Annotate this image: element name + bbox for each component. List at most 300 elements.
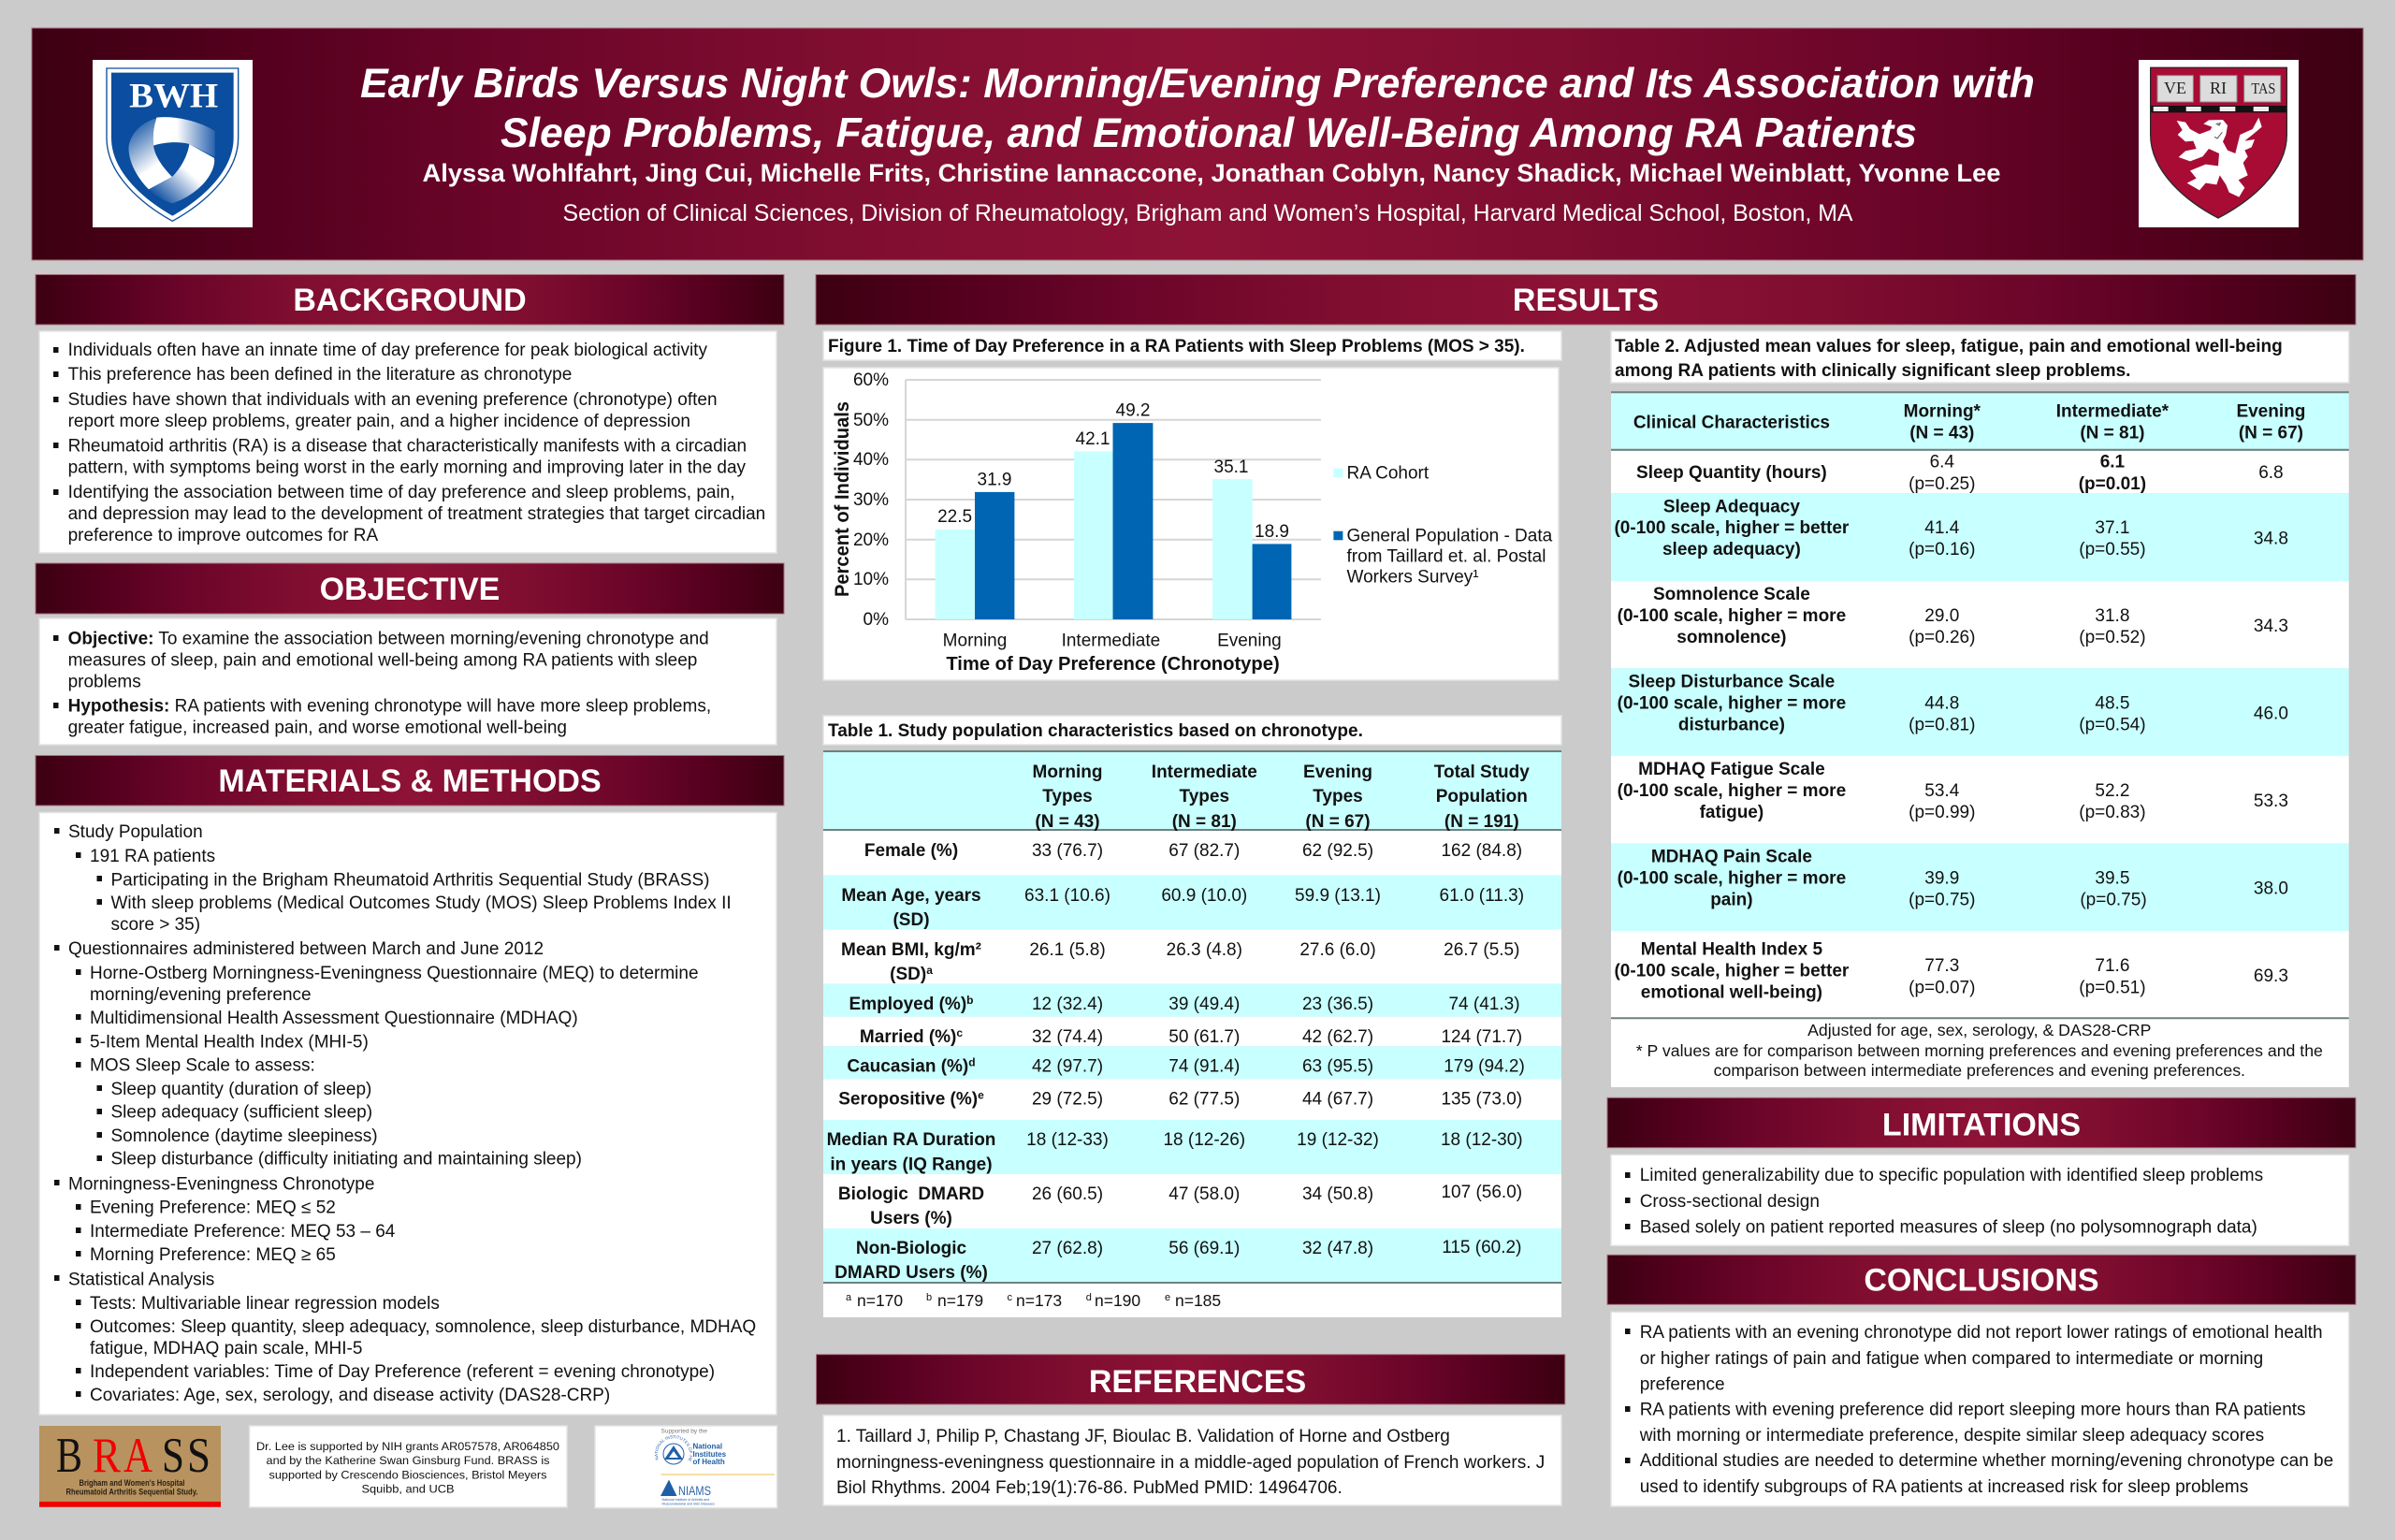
table 1 caption: Table 1. Study population characteristics based on chronotype. bbox=[828, 721, 1363, 741]
panel: materials and methods text: Sleep quantity (duration of sleep) bbox=[110, 1080, 371, 1099]
heading: limitations: LIMITATIONS bbox=[1882, 1108, 2081, 1143]
row: MDHAQ fatigue scale: 53.3 bbox=[2254, 792, 2288, 811]
row: sleep adequacy: Sleep Adequacy bbox=[1663, 498, 1800, 516]
funding note: Dr. Lee is supported by NIH grants AR057578, AR064850 bbox=[256, 1440, 559, 1453]
panel: limitations text: Limited generalizability due to specific population with identified sleep problems bbox=[1640, 1166, 2263, 1185]
panel: materials and methods text: Sleep disturbance (difficulty initiating and maintaining sleep) bbox=[110, 1150, 582, 1170]
row: sleep adequacy: 41.4 bbox=[1924, 518, 1960, 538]
row: mean BMI: 26.7 (5.5) bbox=[1444, 940, 1519, 960]
table 1 footnotes: n=170 bbox=[857, 1291, 903, 1310]
logos: NIH and NIAMS: Musculoskeletal and Skin Diseases bbox=[662, 1503, 715, 1506]
row: biologic DMARD: 47 (58.0) bbox=[1168, 1184, 1240, 1204]
panel: materials and methods text: 191 RA patients bbox=[90, 847, 215, 866]
row: sleep disturbance scale: (p=0.54) bbox=[2079, 715, 2146, 735]
row: sleep disturbance scale: disturbance) bbox=[1678, 715, 1785, 735]
logo: BRASS: B bbox=[56, 1429, 82, 1483]
y axis labels: 0% bbox=[864, 610, 889, 630]
panel: background text: preference to improve outcomes for RA bbox=[68, 526, 379, 545]
row: sleep quantity: 6.8 bbox=[2258, 463, 2284, 483]
panel: materials and methods text: morning/evening preference bbox=[90, 985, 312, 1005]
row: seropositive: 29 (72.5) bbox=[1032, 1090, 1103, 1110]
logo: BWH shield: BWH bbox=[129, 78, 218, 116]
row: mental health index: (0-100 scale, higher = better bbox=[1614, 962, 1850, 981]
title: Sleep Problems, Fatigue, and Emotional Well-Being Among RA Patients bbox=[501, 110, 1917, 156]
row: MDHAQ fatigue scale: (p=0.83) bbox=[2079, 803, 2146, 822]
panel: limitations text: Based solely on patient reported measures of sleep (no polysomnograph data) bbox=[1640, 1218, 2257, 1237]
row: married: 42 (62.7) bbox=[1302, 1027, 1373, 1047]
logo: Harvard shield: TAS bbox=[2251, 80, 2275, 97]
row: mental health index: 77.3 bbox=[1924, 956, 1959, 976]
bars: evening bbox=[1212, 458, 1291, 619]
table 2 header: (N = 43) bbox=[1909, 423, 1974, 443]
panel: background text: report more sleep problems, greater pain, and a higher incidence of depression bbox=[68, 412, 690, 431]
logo: BRASS: Brigham and Women's Hospital bbox=[79, 1478, 185, 1489]
panel: conclusions text: preference bbox=[1640, 1375, 1725, 1394]
row: employed: Employed (%) bbox=[849, 995, 966, 1014]
row: sleep quantity bbox=[1611, 451, 2349, 494]
row: MDHAQ pain scale bbox=[1611, 844, 2349, 931]
row: non-biologic DMARD: DMARD Users (%) bbox=[835, 1263, 988, 1283]
row: MDHAQ pain scale: (0-100 scale, higher = more bbox=[1618, 868, 1846, 889]
heading: materials and methods: MATERIALS & METHODS bbox=[218, 763, 602, 799]
row: female: 67 (82.7) bbox=[1168, 841, 1240, 861]
row: somnolence scale: 31.8 bbox=[2095, 606, 2129, 626]
row: MDHAQ pain scale: (p=0.75) bbox=[2080, 891, 2147, 909]
panel: materials and methods text: Independent variables: Time of Day Preference (referent = evening chronotype) bbox=[90, 1362, 715, 1382]
table 1 header: Population bbox=[1436, 787, 1528, 806]
row: mental health index: (p=0.51) bbox=[2079, 979, 2146, 997]
row: biologic DMARD: Users (%) bbox=[870, 1209, 952, 1228]
panel: materials and methods text: Participating in the Brigham Rheumatoid Arthritis Sequential Study (BRASS) bbox=[110, 870, 709, 890]
figure 1 caption: Figure 1. Time of Day Preference in a RA Patients with Sleep Problems (MOS > 35). bbox=[828, 337, 1525, 356]
row: non-biologic DMARD bbox=[823, 1228, 1561, 1283]
row: MDHAQ pain scale: (p=0.75) bbox=[1909, 891, 1975, 909]
row: MDHAQ pain scale: pain) bbox=[1710, 891, 1753, 909]
panel: materials and methods text: Outcomes: Sleep quantity, sleep adequacy, somnolence, sleep disturbance, MDHAQ bbox=[90, 1317, 756, 1337]
funding note: and by the Katherine Swan Ginsburg Fund. BRASS is bbox=[266, 1454, 550, 1467]
panel: objective text: greater fatigue, increased pain, and worse emotional well-being bbox=[68, 719, 567, 737]
row: MDHAQ pain scale: 38.0 bbox=[2254, 879, 2288, 898]
table 1 footnotes: n=179 bbox=[937, 1291, 983, 1310]
heading: objective bbox=[36, 563, 784, 614]
table 1 footnotes: b bbox=[926, 1292, 932, 1303]
heading: results: RESULTS bbox=[1513, 283, 1659, 318]
row: MDHAQ pain scale: 39.5 bbox=[2095, 868, 2129, 889]
row: married: 124 (71.7) bbox=[1441, 1027, 1522, 1047]
table 2 bbox=[1611, 392, 2349, 1087]
logos: NIH and NIAMS: NIAMS bbox=[678, 1483, 711, 1498]
heading: objective: OBJECTIVE bbox=[320, 572, 500, 607]
heading: conclusions: CONCLUSIONS bbox=[1864, 1262, 2099, 1298]
row: seropositive: 135 (73.0) bbox=[1441, 1090, 1522, 1110]
y axis labels: 40% bbox=[853, 450, 889, 470]
row: seropositive: Seropositive (%) bbox=[838, 1090, 978, 1110]
row: somnolence scale bbox=[1611, 581, 2349, 668]
row: biologic DMARD: 26 (60.5) bbox=[1032, 1184, 1103, 1204]
row: median RA duration: 19 (12-32) bbox=[1297, 1130, 1379, 1150]
row: median RA duration: in years (IQ Range) bbox=[830, 1155, 993, 1175]
row: somnolence scale: Somnolence Scale bbox=[1653, 585, 1810, 604]
title bbox=[360, 61, 2035, 156]
row: MDHAQ fatigue scale: 53.4 bbox=[1924, 781, 1960, 801]
row: mean age: 63.1 (10.6) bbox=[1024, 886, 1110, 906]
table 1 header: Types bbox=[1042, 787, 1093, 806]
table 1 header: Total Study bbox=[1434, 763, 1530, 782]
panel: bar chart figure 1 bbox=[823, 368, 1559, 680]
panel: materials and methods text: Evening Preference: MEQ ≤ 52 bbox=[90, 1198, 336, 1218]
row: sleep disturbance scale: 44.8 bbox=[1924, 694, 1959, 713]
row: non-biologic DMARD: 27 (62.8) bbox=[1032, 1239, 1103, 1258]
panel: materials and methods text: Statistical Analysis bbox=[68, 1270, 214, 1289]
table 2 footnotes: * P values are for comparison between morning preferences and evening preferences and the bbox=[1636, 1041, 2323, 1060]
panel: references text bbox=[823, 1416, 1561, 1505]
row: mental health index: (p=0.07) bbox=[1909, 979, 1975, 997]
panel: background text: and depression may lead to the development of treatment strategies that target circadian bbox=[68, 504, 765, 524]
row: female bbox=[823, 831, 1561, 876]
bars: morning: 31.9 bbox=[978, 470, 1011, 490]
table 2 header: (N = 67) bbox=[2239, 423, 2303, 443]
table 1 footnotes: e bbox=[1165, 1292, 1170, 1303]
table 1 footnotes: a bbox=[846, 1292, 852, 1303]
table 1 header: (N = 43) bbox=[1035, 812, 1100, 832]
row: median RA duration bbox=[823, 1120, 1561, 1175]
affiliation: Section of Clinical Sciences, Division of Rheumatology, Brigham and Women’s Hospital, Harvard Medical School, Boston, MA bbox=[563, 200, 1853, 226]
logos: NIH and NIAMS bbox=[594, 1425, 778, 1508]
logo: Harvard shield: VE bbox=[2164, 79, 2186, 97]
table 2 caption bbox=[1611, 331, 2349, 383]
row: caucasian: 42 (97.7) bbox=[1032, 1057, 1103, 1077]
row: sleep adequacy: 37.1 bbox=[2095, 518, 2129, 538]
panel: materials and methods text bbox=[39, 812, 777, 1415]
panel: materials and methods text: score > 35) bbox=[110, 915, 200, 935]
row: sleep disturbance scale: (p=0.81) bbox=[1909, 715, 1975, 735]
panel: conclusions text: RA patients with an evening chronotype did not report lower ratings of emotional health bbox=[1640, 1323, 2323, 1343]
logos: NIH and NIAMS: NATIONAL INSTITUTES OF HEALTH bbox=[655, 1435, 692, 1461]
row: mean BMI: 26.1 (5.8) bbox=[1029, 940, 1106, 960]
table 1 header: Types bbox=[1180, 787, 1229, 806]
row: sleep quantity: (p=0.25) bbox=[1909, 474, 1975, 494]
row: employed: 39 (49.4) bbox=[1168, 995, 1240, 1014]
logo: BRASS: A bbox=[123, 1429, 152, 1483]
row: mean BMI: a bbox=[926, 964, 933, 977]
legend: from Taillard et. al. Postal bbox=[1347, 546, 1546, 567]
row: sleep adequacy: 34.8 bbox=[2254, 530, 2288, 548]
bars: intermediate: 42.1 bbox=[1076, 429, 1110, 449]
table 2 header bbox=[1611, 392, 2349, 450]
logos: NIH and NIAMS: National bbox=[692, 1443, 722, 1450]
row: biologic DMARD bbox=[823, 1174, 1561, 1228]
panel: conclusions text: or higher ratings of pain and fatigue when compared to intermediate or morning bbox=[1640, 1349, 2263, 1369]
row: mean BMI: 26.3 (4.8) bbox=[1167, 940, 1242, 960]
row: mean BMI bbox=[823, 929, 1561, 984]
bars: evening: 18.9 bbox=[1255, 522, 1289, 542]
heading: limitations bbox=[1607, 1097, 2356, 1148]
row: MDHAQ fatigue scale: MDHAQ Fatigue Scale bbox=[1638, 760, 1825, 779]
table 2 caption: among RA patients with clinically significant sleep problems. bbox=[1615, 361, 2130, 381]
title: Early Birds Versus Night Owls: Morning/Evening Preference and Its Association with bbox=[360, 61, 2035, 107]
row: non-biologic DMARD: Non-Biologic bbox=[856, 1239, 967, 1258]
row: female: Female (%) bbox=[864, 841, 958, 861]
authors: Alyssa Wohlfahrt, Jing Cui, Michelle Frits, Christine Iannaccone, Jonathan Coblyn, Nancy Shadick, Michael Weinblatt, Yvonne Lee bbox=[423, 159, 2000, 187]
legend: RA Cohort bbox=[1347, 464, 1430, 483]
panel: background text: pattern, with symptoms being worst in the early morning and improving later in the day bbox=[68, 458, 747, 477]
row: MDHAQ fatigue scale bbox=[1611, 756, 2349, 844]
row: married: c bbox=[956, 1026, 963, 1039]
row: non-biologic DMARD: 115 (60.2) bbox=[1442, 1238, 1521, 1257]
row: employed: b bbox=[966, 994, 973, 1007]
x axis categories: Morning bbox=[943, 631, 1007, 651]
row: caucasian bbox=[823, 1046, 1561, 1079]
panel: materials and methods text: 5-Item Mental Health Index (MHI-5) bbox=[90, 1032, 369, 1052]
row: median RA duration: Median RA Duration bbox=[827, 1130, 995, 1150]
table 1 header bbox=[823, 751, 1561, 832]
bars: intermediate: 49.2 bbox=[1116, 400, 1150, 421]
row: somnolence scale: 34.3 bbox=[2254, 617, 2288, 636]
logo: BWH shield bbox=[93, 60, 253, 227]
row: mean BMI: 27.6 (6.0) bbox=[1299, 940, 1376, 960]
table 1 caption bbox=[823, 716, 1561, 745]
table 1 header: Morning bbox=[1033, 763, 1102, 782]
legend bbox=[1333, 464, 1553, 588]
row: mental health index: emotional well-being) bbox=[1641, 982, 1822, 1003]
y axis title: Percent of Individuals bbox=[832, 401, 853, 597]
panel: objective text: Objective: To examine the association between morning/evening chronotype and bbox=[68, 629, 709, 649]
panel: materials and methods text: Study Population bbox=[68, 822, 203, 842]
row: sleep adequacy bbox=[1611, 493, 2349, 581]
panel: background text: Studies have shown that individuals with an evening preference (chronotype) often bbox=[68, 390, 718, 410]
table 2 header: Clinical Characteristics bbox=[1633, 414, 1830, 432]
y axis labels bbox=[853, 370, 889, 630]
row: mean age: 60.9 (10.0) bbox=[1161, 886, 1247, 906]
row: sleep disturbance scale bbox=[1611, 668, 2349, 756]
funding note: supported by Crescendo Biosciences, Bristol Meyers bbox=[269, 1469, 546, 1482]
table 2 header: Evening bbox=[2236, 402, 2305, 421]
row: mental health index: Mental Health Index 5 bbox=[1641, 939, 1822, 960]
heading: background: BACKGROUND bbox=[293, 283, 527, 318]
logo: Harvard shield: RI bbox=[2210, 79, 2227, 97]
logo: BRASS: R bbox=[93, 1429, 122, 1483]
row: female: 33 (76.7) bbox=[1032, 841, 1103, 861]
panel: references text: 1. Taillard J, Philip P, Chastang JF, Bioulac B. Validation of Horne and Ostberg bbox=[836, 1427, 1450, 1446]
y axis labels: 10% bbox=[853, 570, 889, 589]
row: caucasian: d bbox=[968, 1056, 976, 1069]
panel: conclusions text: RA patients with evening preference did report sleeping more hours than RA patients bbox=[1640, 1400, 2306, 1420]
table 1 footnotes: d bbox=[1086, 1292, 1092, 1303]
table 1 header: Evening bbox=[1303, 763, 1372, 782]
panel: background text: Identifying the association between time of day preference and sleep problems, pain, bbox=[68, 483, 735, 502]
row: biologic DMARD: 107 (56.0) bbox=[1441, 1183, 1522, 1202]
row: median RA duration: 18 (12-26) bbox=[1163, 1130, 1245, 1150]
row: sleep disturbance scale: (0-100 scale, higher = more bbox=[1618, 694, 1846, 713]
panel: background text: Rheumatoid arthritis (RA) is a disease that characteristically manifests with a circadian bbox=[68, 436, 747, 457]
table 1 footnotes bbox=[823, 1283, 1561, 1317]
legend: General Population - Data bbox=[1347, 526, 1553, 546]
row: sleep adequacy: (p=0.55) bbox=[2079, 540, 2146, 559]
table 1 header: Intermediate bbox=[1152, 763, 1257, 782]
panel: materials and methods text: Horne-Ostberg Morningness-Eveningness Questionnaire (MEQ) to determine bbox=[90, 964, 699, 983]
y axis labels: 60% bbox=[853, 370, 889, 390]
table 2 caption: Table 2. Adjusted mean values for sleep, fatigue, pain and emotional well-being bbox=[1615, 337, 2283, 356]
table 1 header: (N = 191) bbox=[1444, 812, 1519, 832]
logo: BRASS: Rheumatoid Arthritis Sequential Study. bbox=[65, 1488, 198, 1497]
row: sleep quantity: (p=0.01) bbox=[2079, 474, 2146, 494]
table 1 header: Types bbox=[1313, 787, 1363, 806]
panel: materials and methods text: Tests: Multivariable linear regression models bbox=[90, 1294, 440, 1314]
heading: background bbox=[36, 275, 784, 325]
x axis categories: Evening bbox=[1217, 631, 1282, 651]
row: employed: 12 (32.4) bbox=[1032, 995, 1103, 1014]
row: employed bbox=[823, 984, 1561, 1017]
row: sleep adequacy: (0-100 scale, higher = better bbox=[1614, 518, 1850, 538]
table 1 footnotes: n=190 bbox=[1095, 1291, 1140, 1310]
table 2 footnotes: Adjusted for age, sex, serology, & DAS28-CRP bbox=[1807, 1021, 2151, 1039]
panel: references text: morningness-eveningness questionnaire in a middle-aged population of French workers. J bbox=[836, 1453, 1545, 1473]
row: MDHAQ fatigue scale: (p=0.99) bbox=[1909, 803, 1975, 822]
row: female: 162 (84.8) bbox=[1441, 841, 1522, 861]
row: caucasian: 179 (94.2) bbox=[1444, 1057, 1525, 1077]
funding note bbox=[250, 1426, 567, 1507]
row: seropositive bbox=[823, 1079, 1561, 1120]
table 1 header: (N = 81) bbox=[1172, 812, 1237, 832]
logo: BRASS bbox=[39, 1426, 221, 1507]
row: mean age: (SD) bbox=[893, 910, 930, 930]
table 1 header: (N = 67) bbox=[1305, 812, 1371, 832]
logos: NIH and NIAMS: Institutes bbox=[692, 1450, 727, 1459]
row: seropositive: e bbox=[978, 1089, 984, 1102]
heading: materials and methods bbox=[36, 756, 784, 806]
row: non-biologic DMARD: 56 (69.1) bbox=[1168, 1239, 1240, 1258]
row: mean age: 61.0 (11.3) bbox=[1440, 886, 1524, 906]
panel: background text: Individuals often have an innate time of day preference for peak biological activity bbox=[68, 341, 707, 360]
row: mental health index: 71.6 bbox=[2095, 956, 2129, 976]
row: seropositive: 44 (67.7) bbox=[1302, 1090, 1373, 1110]
panel: objective text: measures of sleep, pain and emotional well-being among RA patients with sleep bbox=[68, 651, 697, 670]
panel: background text: This preference has been defined in the literature as chronotype bbox=[68, 365, 572, 385]
panel: conclusions text: Additional studies are needed to determine whether morning/evening chronotype can be bbox=[1640, 1451, 2333, 1471]
logos: NIH and NIAMS: of Health bbox=[692, 1458, 725, 1466]
panel: materials and methods text: Intermediate Preference: MEQ 53 – 64 bbox=[90, 1222, 396, 1242]
row: sleep disturbance scale: 48.5 bbox=[2095, 694, 2129, 713]
row: mental health index: 69.3 bbox=[2254, 966, 2288, 986]
panel: background text bbox=[39, 331, 777, 553]
panel: references text: Biol Rhythms. 2004 Feb;19(1):76-86. PubMed PMID: 14964706. bbox=[836, 1478, 1343, 1498]
table 2 header: (N = 81) bbox=[2080, 423, 2144, 443]
row: sleep quantity: Sleep Quantity (hours) bbox=[1636, 463, 1827, 483]
row: MDHAQ pain scale: 39.9 bbox=[1924, 868, 1959, 889]
panel: materials and methods text: With sleep problems (Medical Outcomes Study (MOS) Sleep Problems Index II bbox=[110, 893, 732, 913]
panel: materials and methods text: Sleep adequacy (sufficient sleep) bbox=[110, 1103, 372, 1123]
row: married: Married (%) bbox=[860, 1027, 956, 1047]
table 1 bbox=[823, 751, 1561, 1317]
bars: morning bbox=[936, 470, 1014, 619]
row: median RA duration: 18 (12-30) bbox=[1441, 1130, 1523, 1150]
row: married: 50 (61.7) bbox=[1168, 1027, 1240, 1047]
panel: limitations text bbox=[1611, 1155, 2349, 1245]
panel: materials and methods text: Morning Preference: MEQ ≥ 65 bbox=[90, 1245, 336, 1265]
row: sleep adequacy: sleep adequacy) bbox=[1662, 540, 1801, 559]
legend: Workers Survey¹ bbox=[1347, 567, 1479, 588]
row: mean BMI: Mean BMI, kg/m² bbox=[841, 940, 981, 960]
row: mean BMI: (SD) bbox=[890, 965, 926, 984]
y axis labels: 50% bbox=[853, 411, 889, 430]
panel: conclusions text: used to identify subgroups of RA patients at increased risk for sleep problems bbox=[1640, 1477, 2248, 1497]
table 2 footnotes bbox=[1611, 1018, 2349, 1087]
table 1 footnotes: c bbox=[1007, 1292, 1012, 1303]
row: seropositive: 62 (77.5) bbox=[1168, 1090, 1240, 1110]
row: MDHAQ fatigue scale: fatigue) bbox=[1700, 803, 1764, 822]
panel: objective text bbox=[39, 618, 777, 745]
row: sleep quantity: 6.1 bbox=[2100, 453, 2126, 472]
heading: references: REFERENCES bbox=[1089, 1364, 1306, 1400]
row: biologic DMARD: 34 (50.8) bbox=[1302, 1184, 1373, 1204]
row: married: 32 (74.4) bbox=[1032, 1027, 1103, 1047]
header banner bbox=[32, 28, 2363, 260]
heading: results bbox=[816, 275, 2356, 325]
row: biologic DMARD: Biologic DMARD bbox=[838, 1184, 984, 1204]
row: MDHAQ fatigue scale: (0-100 scale, higher = more bbox=[1618, 781, 1846, 801]
row: sleep adequacy: (p=0.16) bbox=[1909, 540, 1975, 559]
logo: BRASS: S bbox=[187, 1429, 210, 1483]
row: somnolence scale: somnolence) bbox=[1676, 628, 1787, 647]
figure 1 caption bbox=[823, 331, 1561, 360]
row: caucasian: Caucasian (%) bbox=[847, 1057, 968, 1077]
row: caucasian: 63 (95.5) bbox=[1302, 1057, 1373, 1077]
panel: materials and methods text: Covariates: Age, sex, serology, and disease activity (DAS28-CRP) bbox=[90, 1386, 610, 1405]
logo: BRASS: S bbox=[162, 1429, 184, 1483]
bars: morning: 22.5 bbox=[937, 507, 972, 527]
panel: conclusions text bbox=[1611, 1312, 2349, 1506]
table 2 footnotes: comparison between intermediate preferences and evening preferences. bbox=[1714, 1061, 2245, 1080]
row: MDHAQ pain scale: MDHAQ Pain Scale bbox=[1651, 848, 1812, 866]
row: mean age bbox=[823, 876, 1561, 930]
funding note: Squibb, and UCB bbox=[361, 1482, 455, 1495]
row: MDHAQ fatigue scale: 52.2 bbox=[2095, 781, 2129, 801]
table 2 header: Intermediate* bbox=[2056, 402, 2170, 421]
x axis categories bbox=[943, 631, 1282, 651]
row: caucasian: 74 (91.4) bbox=[1168, 1057, 1240, 1077]
panel: materials and methods text: Questionnaires administered between March and June 2012 bbox=[68, 939, 544, 959]
panel: objective text: problems bbox=[68, 672, 141, 692]
panel: materials and methods text: MOS Sleep Scale to assess: bbox=[90, 1056, 315, 1076]
panel: materials and methods text: Morningness-Eveningness Chronotype bbox=[68, 1174, 374, 1194]
panel: materials and methods text: fatigue, MDHAQ pain scale, MHI-5 bbox=[90, 1339, 362, 1358]
heading: conclusions bbox=[1607, 1255, 2356, 1304]
y axis labels: 20% bbox=[853, 530, 889, 550]
row: somnolence scale: (p=0.26) bbox=[1909, 628, 1975, 647]
panel: objective text: Hypothesis: RA patients with evening chronotype will have more sleep problems, bbox=[68, 696, 711, 717]
x axis title: Time of Day Preference (Chronotype) bbox=[946, 654, 1280, 675]
row: somnolence scale: (p=0.52) bbox=[2079, 628, 2146, 647]
logos: NIH and NIAMS: Supported by the bbox=[660, 1428, 707, 1435]
bars: intermediate bbox=[1074, 400, 1153, 619]
row: employed: 74 (41.3) bbox=[1448, 995, 1520, 1014]
panel: materials and methods text: Somnolence (daytime sleepiness) bbox=[110, 1126, 378, 1146]
logos: NIH and NIAMS: National Institute of Arthritis and bbox=[662, 1498, 709, 1502]
logo: Harvard shield bbox=[2139, 60, 2299, 227]
table 2 header: Morning* bbox=[1904, 402, 1981, 421]
panel: conclusions text: with morning or intermediate preference, despite similar sleep adequacy scores bbox=[1639, 1426, 2264, 1446]
panel: limitations text: Cross-sectional design bbox=[1640, 1192, 1820, 1212]
row: married bbox=[823, 1017, 1561, 1047]
heading: references bbox=[816, 1355, 1565, 1404]
row: mean age: 59.9 (13.1) bbox=[1295, 886, 1381, 906]
row: median RA duration: 18 (12-33) bbox=[1026, 1130, 1109, 1150]
y axis labels: 30% bbox=[853, 490, 889, 510]
table 1 footnotes: n=185 bbox=[1175, 1291, 1221, 1310]
panel: materials and methods text: Multidimensional Health Assessment Questionnaire (MDHAQ) bbox=[90, 1009, 578, 1028]
row: somnolence scale: 29.0 bbox=[1924, 606, 1959, 626]
row: mental health index bbox=[1611, 931, 2349, 1018]
